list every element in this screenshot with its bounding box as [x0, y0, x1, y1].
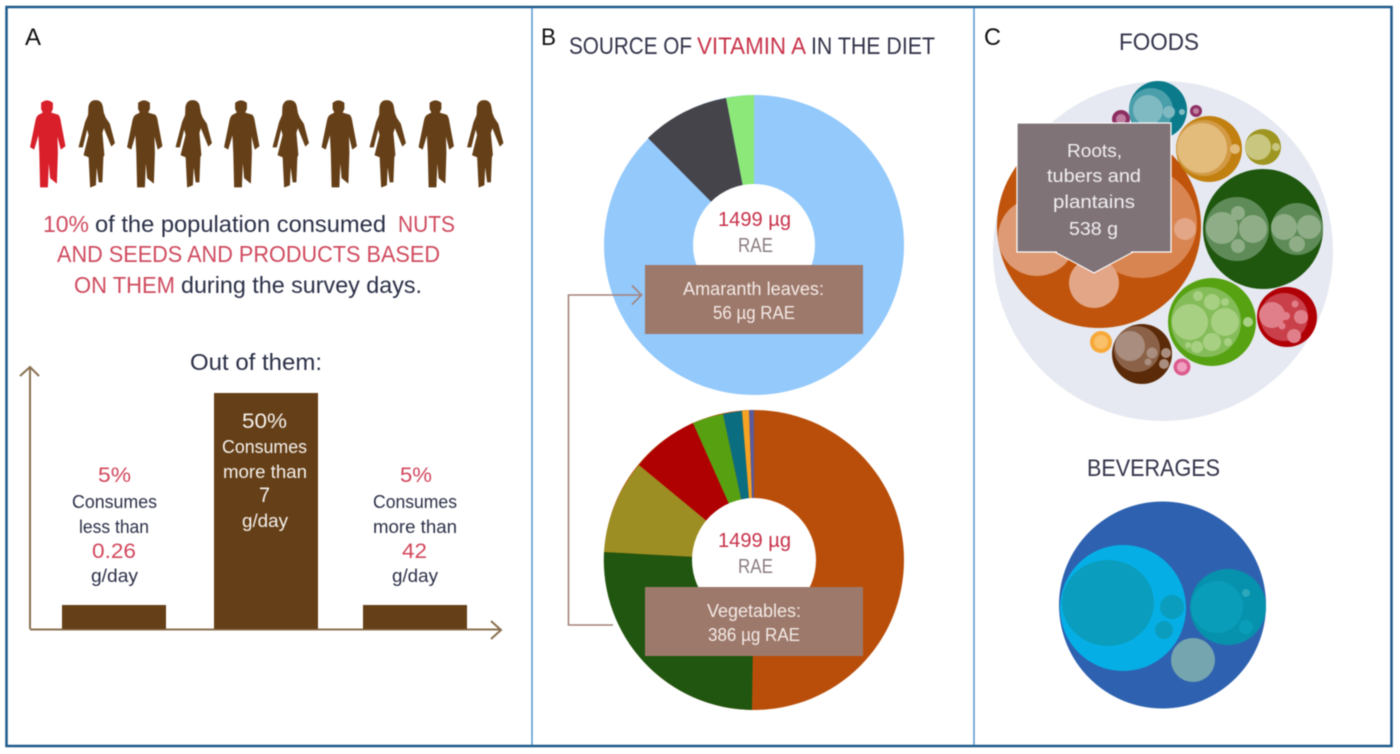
callout: amaranth leaves: Amaranth leaves: — [683, 279, 824, 299]
text block: population statement: NUTS — [398, 211, 455, 237]
heading: foods: FOODS — [1119, 29, 1199, 56]
bubble: olive — [1245, 129, 1281, 165]
bar: median consumers — [214, 393, 318, 629]
panel letter B: B — [541, 24, 556, 51]
bubble: light green — [1168, 278, 1256, 366]
donut chart: total diet sources — [604, 410, 904, 710]
panel B title: VITAMIN A — [697, 33, 806, 60]
text block: population statement: AND SEEDS AND PRODUCTS BASED — [57, 241, 440, 267]
donut centre value: 1499 µg — [718, 209, 791, 231]
bar label: 50% more than 7: 7 — [259, 484, 270, 507]
donut chart: vegetables breakdown — [604, 95, 904, 395]
bar label: 5% more than 42: g/day — [392, 566, 438, 586]
bar label: 50% more than 7: more than — [223, 462, 307, 482]
panel letter C: C — [984, 24, 1001, 51]
heading: beverages: BEVERAGES — [1087, 455, 1220, 482]
bar label: 5% less than 0.26: 5% — [98, 464, 131, 487]
donut centre value: RAE — [738, 235, 773, 257]
panel B title — [569, 33, 935, 60]
bubble: teal — [1190, 569, 1266, 645]
callout: vegetables: 386 µg RAE — [708, 625, 800, 645]
bubble chart: beverages — [1059, 502, 1266, 708]
bubble: fruit teal — [1129, 81, 1187, 139]
callout: roots, tubers and plantains: tubers and — [1047, 166, 1141, 186]
callout: roots, tubers and plantains: Roots, — [1067, 141, 1122, 161]
bubble: roots, tubers and plantains — [997, 124, 1201, 328]
donut centre value: 1499 µg — [718, 530, 791, 552]
bar label: 5% less than 0.26: less than — [79, 517, 149, 537]
bubble: small orange — [1090, 331, 1112, 353]
text block: population statement — [43, 211, 455, 298]
donut centre value: RAE — [738, 556, 773, 578]
bar label: 50% more than 7: g/day — [242, 511, 288, 531]
panel B: source of vitamin A — [541, 24, 935, 710]
panel letter A: A — [25, 24, 41, 51]
bar: high consumers — [363, 605, 467, 629]
bubble: brown — [1112, 324, 1172, 384]
bubble: largest cyan — [1060, 545, 1186, 671]
text block: population statement: 10% — [43, 211, 89, 237]
bar label: 5% more than 42 — [373, 464, 457, 586]
callout: roots, tubers and plantains — [1017, 123, 1171, 273]
donut centre value — [718, 530, 791, 578]
bubble: small magenta — [1112, 110, 1130, 128]
bar label: 5% less than 0.26: 0.26 — [92, 540, 136, 563]
panel B title: IN THE DIET — [811, 33, 935, 60]
bubble: vegetables dark green — [1203, 169, 1323, 289]
bar label: 50% more than 7 — [222, 410, 307, 531]
icon row: ten population silhouettes — [30, 100, 503, 187]
bar chart: consumption distribution — [20, 367, 501, 639]
callout: roots, tubers and plantains: 538 g — [1069, 219, 1118, 239]
bubble: red — [1257, 287, 1317, 347]
bar label: 5% less than 0.26: g/day — [91, 566, 138, 586]
bubble chart: foods — [993, 81, 1333, 421]
panel B title: SOURCE OF — [569, 33, 692, 60]
callout: amaranth leaves: 56 µg RAE — [713, 303, 795, 323]
bar label: 5% more than 42: Consumes — [373, 492, 457, 512]
bar label: 5% more than 42: 5% — [400, 464, 432, 487]
chart axes with arrows — [20, 367, 501, 639]
callout: amaranth leaves — [645, 265, 863, 334]
donut centre value — [718, 209, 791, 257]
callout: vegetables: Vegetables: — [707, 601, 801, 621]
heading: out of them: Out of them: — [190, 349, 322, 375]
bubble: small pink — [1174, 358, 1190, 376]
panel A: nuts and seeds consumption — [20, 24, 503, 639]
bar label: 5% more than 42: 42 — [402, 540, 427, 563]
connector arrow between donuts — [568, 286, 642, 625]
callout: vegetables — [645, 587, 863, 656]
bubble: grey — [1171, 638, 1215, 682]
bar: low consumers — [62, 605, 166, 629]
bar label: 50% more than 7: 50% — [242, 410, 287, 433]
bar label: 5% less than 0.26 — [72, 464, 157, 586]
text block: population statement: during the survey days. — [181, 272, 422, 298]
bubble: gold — [1176, 116, 1242, 182]
text block: population statement: ON THEM — [74, 272, 175, 298]
bar label: 5% more than 42: more than — [373, 517, 457, 537]
callout: roots, tubers and plantains: plantains — [1053, 192, 1135, 212]
text block: population statement: of the population consumed — [95, 211, 386, 237]
bubble: small plum — [1190, 105, 1202, 117]
bar label: 5% less than 0.26: Consumes — [72, 492, 157, 512]
bar label: 50% more than 7: Consumes — [222, 437, 307, 457]
panel C: foods and beverages — [984, 24, 1333, 708]
